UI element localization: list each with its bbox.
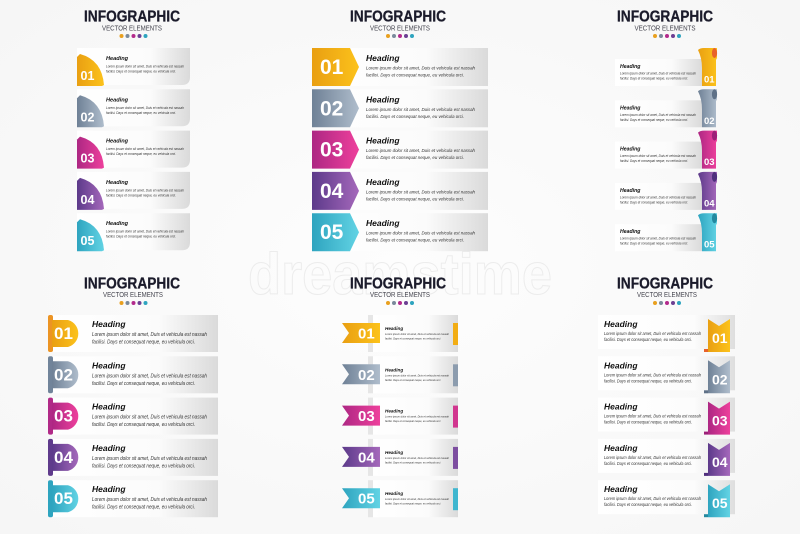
item 02: 02	[712, 371, 728, 387]
item 01: Lorem ipsum dolor sit amet, Duis et vehicula est nassah	[92, 332, 207, 338]
item 05: Lorem ipsum dolor sit amet, Duis et vehicula est nassah	[604, 496, 701, 501]
item 04: Lorem ipsum dolor sit amet, Duis et vehicula est nassah	[620, 195, 696, 199]
item 03	[77, 131, 190, 169]
item 03: facilisi. Days et consequat neque, eu vehicula orci.	[92, 422, 195, 428]
item 05: Heading	[92, 484, 126, 494]
heading: top centre: INFOGRAPHIC	[350, 8, 446, 26]
item 02: Heading	[620, 105, 641, 111]
item 05: Lorem ipsum dolor sit amet, Duis et vehicula est nassah	[366, 231, 475, 237]
item 05: 05	[712, 495, 728, 511]
heading: bottom centre	[350, 276, 446, 305]
item 04: facilisi. Days et consequat neque, eu vehicula orci.	[106, 193, 176, 197]
item 01: Lorem ipsum dolor sit amet, Duis et vehicula est nassah	[385, 332, 449, 336]
item 01: Lorem ipsum dolor sit amet, Duis et vehicula est nassah	[604, 331, 701, 336]
item 02: facilisi. Days et consequat neque, eu vehicula orci.	[604, 378, 692, 383]
item 05: Lorem ipsum dolor sit amet, Duis et vehicula est nassah	[106, 230, 184, 234]
item 05: 05	[320, 221, 344, 244]
item 03	[312, 131, 488, 169]
heading: bottom right: VECTOR ELEMENTS	[637, 290, 697, 299]
item 03: Lorem ipsum dolor sit amet, Duis et vehicula est nassah	[385, 415, 449, 419]
item 03: 03	[712, 413, 728, 429]
heading: bottom right: INFOGRAPHIC	[617, 276, 713, 292]
item 04: facilisi. Days et consequat neque, eu vehicula orci.	[385, 460, 441, 464]
item 01: 01	[80, 69, 94, 83]
item 05: 05	[54, 489, 73, 508]
item 01	[312, 48, 488, 86]
item 04	[48, 439, 218, 476]
panel: top right infographic	[615, 8, 717, 251]
item 04: Lorem ipsum dolor sit amet, Duis et vehicula est nassah	[366, 189, 475, 195]
heading: top right: INFOGRAPHIC	[617, 8, 713, 26]
item 02: facilisi. Days et consequat neque, eu vehicula orci.	[92, 381, 195, 387]
item 03: Heading	[92, 402, 126, 412]
item 01: Heading	[92, 319, 126, 329]
item 01	[342, 315, 458, 352]
item 04: Lorem ipsum dolor sit amet, Duis et vehicula est nassah	[385, 456, 449, 460]
heading: top left: VECTOR ELEMENTS	[102, 24, 162, 32]
item 03	[342, 398, 458, 435]
item 02: Heading	[106, 97, 129, 103]
item 04	[615, 172, 717, 210]
item 02: 02	[80, 110, 94, 124]
item 02: Heading	[366, 94, 400, 104]
item 03: Lorem ipsum dolor sit amet, Duis et vehicula est nassah	[106, 147, 184, 151]
item 04: Heading	[385, 450, 403, 455]
item 04: 04	[712, 454, 728, 470]
item 03: facilisi. Days et consequat neque, eu vehicula orci.	[604, 420, 692, 425]
heading: top centre: VECTOR ELEMENTS	[370, 24, 430, 32]
item 03: Lorem ipsum dolor sit amet, Duis et vehicula est nassah	[604, 414, 701, 419]
item 01: 01	[358, 326, 375, 342]
item 01: Heading	[385, 326, 403, 331]
item 03	[48, 398, 218, 435]
item 03	[598, 398, 735, 435]
item 02: facilisi. Days et consequat neque, eu vehicula orci.	[366, 114, 464, 120]
item 03: Lorem ipsum dolor sit amet, Duis et vehicula est nassah	[620, 154, 696, 158]
item 03: facilisi. Days et consequat neque, eu vehicula orci.	[366, 155, 464, 161]
item 03: Heading	[604, 402, 638, 412]
item 04: facilisi. Days et consequat neque, eu vehicula orci.	[604, 461, 692, 466]
item 02: Lorem ipsum dolor sit amet, Duis et vehicula est nassah	[366, 107, 475, 113]
item 01	[77, 48, 190, 86]
panel: top left infographic	[77, 8, 190, 251]
item 04: 04	[704, 198, 715, 209]
heading: bottom right	[617, 276, 713, 305]
item 05	[615, 213, 717, 251]
item 04: facilisi. Days et consequat neque, eu vehicula orci.	[620, 200, 688, 204]
item 05: facilisi. Days et consequat neque, eu vehicula orci.	[604, 502, 692, 507]
item 03: facilisi. Days et consequat neque, eu vehicula orci.	[620, 159, 688, 163]
heading: top left: INFOGRAPHIC	[84, 8, 180, 26]
panel: bottom centre infographic	[342, 276, 458, 517]
heading: top centre	[350, 8, 446, 38]
panel: bottom right infographic	[598, 276, 735, 517]
item 05: facilisi. Days et consequat neque, eu vehicula orci.	[92, 505, 195, 511]
item 02: Lorem ipsum dolor sit amet, Duis et vehicula est nassah	[604, 372, 701, 377]
item 04: 04	[320, 180, 344, 203]
item 03: Heading	[106, 139, 129, 145]
item 04: facilisi. Days et consequat neque, eu vehicula orci.	[366, 196, 464, 202]
item 01	[48, 315, 218, 352]
item 02	[312, 89, 488, 127]
item 01: Lorem ipsum dolor sit amet, Duis et vehicula est nassah	[620, 72, 696, 76]
item 02: Heading	[385, 367, 403, 372]
item 04: Heading	[366, 177, 400, 187]
item 05: Lorem ipsum dolor sit amet, Duis et vehicula est nassah	[620, 237, 696, 241]
item 05: facilisi. Days et consequat neque, eu vehicula orci.	[385, 502, 441, 506]
item 02: Heading	[92, 360, 126, 370]
item 04: 04	[358, 449, 375, 466]
item 01	[615, 48, 717, 86]
item 05: Lorem ipsum dolor sit amet, Duis et vehicula est nassah	[92, 497, 207, 503]
panel: top centre infographic	[312, 8, 488, 251]
item 02: Lorem ipsum dolor sit amet, Duis et vehicula est nassah	[106, 106, 184, 110]
item 03: 03	[320, 139, 343, 162]
item 03	[615, 131, 717, 169]
item 03: Lorem ipsum dolor sit amet, Duis et vehicula est nassah	[92, 415, 207, 421]
heading: bottom centre: VECTOR ELEMENTS	[370, 290, 430, 299]
item 05	[312, 213, 488, 251]
item 02: Lorem ipsum dolor sit amet, Duis et vehicula est nassah	[620, 113, 696, 117]
heading: bottom centre: INFOGRAPHIC	[350, 276, 446, 292]
item 01: Heading	[366, 53, 400, 63]
item 02: 02	[54, 365, 73, 384]
item 02	[77, 89, 190, 127]
item 04	[312, 172, 488, 210]
item 03: facilisi. Days et consequat neque, eu vehicula orci.	[106, 152, 176, 156]
item 05	[342, 480, 458, 517]
item 01: 01	[704, 74, 715, 86]
item 01: Heading	[604, 319, 638, 329]
item 04: Heading	[106, 180, 129, 186]
item 01: facilisi. Days et consequat neque, eu vehicula orci.	[604, 337, 692, 342]
item 02: 02	[358, 367, 375, 384]
item 05	[598, 480, 735, 517]
item 05: 05	[80, 234, 94, 248]
item 01: facilisi. Days et consequat neque, eu vehicula orci.	[106, 70, 176, 74]
item 04: Lorem ipsum dolor sit amet, Duis et vehicula est nassah	[106, 188, 184, 192]
item 05: Heading	[106, 221, 129, 227]
item 05: Heading	[604, 484, 638, 494]
item 04	[598, 439, 735, 476]
item 01: facilisi. Days et consequat neque, eu vehicula orci.	[385, 336, 441, 340]
item 04: Lorem ipsum dolor sit amet, Duis et vehicula est nassah	[92, 456, 207, 462]
item 03: 03	[358, 408, 375, 425]
heading: top right: VECTOR ELEMENTS	[634, 24, 696, 32]
item 05: Lorem ipsum dolor sit amet, Duis et vehicula est nassah	[385, 497, 449, 501]
item 04: facilisi. Days et consequat neque, eu vehicula orci.	[92, 463, 195, 469]
item 01: Lorem ipsum dolor sit amet, Duis et vehicula est nassah	[106, 64, 184, 68]
item 04: 04	[80, 193, 94, 207]
heading: bottom left: INFOGRAPHIC	[84, 276, 180, 292]
item 01: facilisi. Days et consequat neque, eu vehicula orci.	[366, 72, 464, 78]
item 02: facilisi. Days et consequat neque, eu vehicula orci.	[620, 118, 688, 122]
item 02: Lorem ipsum dolor sit amet, Duis et vehicula est nassah	[385, 373, 449, 377]
item 01: Heading	[106, 56, 129, 62]
item 01: 01	[712, 330, 728, 346]
item 01: Heading	[620, 64, 641, 70]
item 04: Heading	[620, 188, 641, 194]
item 05: Heading	[620, 229, 641, 235]
item 01: facilisi. Days et consequat neque, eu vehicula orci.	[92, 340, 195, 346]
item 05: 05	[704, 240, 715, 251]
item 04: 04	[54, 448, 73, 467]
item 02: Heading	[604, 360, 638, 370]
item 05: facilisi. Days et consequat neque, eu vehicula orci.	[366, 238, 464, 244]
item 01: facilisi. Days et consequat neque, eu vehicula orci.	[620, 76, 688, 80]
item 02: Lorem ipsum dolor sit amet, Duis et vehicula est nassah	[92, 373, 207, 379]
item 03: Heading	[366, 136, 400, 146]
item 05: facilisi. Days et consequat neque, eu vehicula orci.	[106, 235, 176, 239]
item 01: 01	[54, 324, 73, 343]
item 03: 03	[704, 157, 715, 168]
panel: bottom left infographic	[48, 276, 218, 517]
item 05: Heading	[366, 218, 400, 228]
item 04: Lorem ipsum dolor sit amet, Duis et vehicula est nassah	[604, 455, 701, 460]
heading: bottom left	[84, 276, 180, 305]
item 02	[48, 356, 218, 393]
item 05	[77, 213, 190, 251]
item 05: Heading	[385, 491, 403, 496]
item 04	[342, 439, 458, 476]
heading: top right	[617, 8, 713, 38]
item 03: Heading	[620, 147, 641, 153]
heading: bottom left: VECTOR ELEMENTS	[103, 290, 163, 299]
item 02: 02	[320, 97, 343, 120]
item 02: facilisi. Days et consequat neque, eu vehicula orci.	[106, 111, 176, 115]
heading: top left	[84, 8, 180, 38]
item 02	[615, 89, 717, 127]
item 03: 03	[54, 407, 73, 426]
item 03: facilisi. Days et consequat neque, eu vehicula orci.	[385, 419, 441, 423]
item 02: facilisi. Days et consequat neque, eu vehicula orci.	[385, 378, 441, 382]
item 03: 03	[80, 152, 94, 166]
item 04: Heading	[604, 443, 638, 453]
item 01: Lorem ipsum dolor sit amet, Duis et vehicula est nassah	[366, 66, 475, 72]
item 03: Heading	[385, 409, 403, 414]
item 03: Lorem ipsum dolor sit amet, Duis et vehicula est nassah	[366, 148, 475, 154]
item 05: 05	[358, 491, 375, 508]
item 05: facilisi. Days et consequat neque, eu vehicula orci.	[620, 242, 688, 246]
item 02: 02	[704, 116, 715, 127]
item 04: Heading	[92, 443, 126, 453]
item 05	[48, 480, 218, 517]
item 01	[598, 315, 735, 352]
item 01: 01	[320, 56, 344, 79]
item 04	[77, 172, 190, 210]
watermark: dreamstime	[248, 242, 552, 307]
item 02	[598, 356, 735, 393]
item 02	[342, 356, 458, 393]
